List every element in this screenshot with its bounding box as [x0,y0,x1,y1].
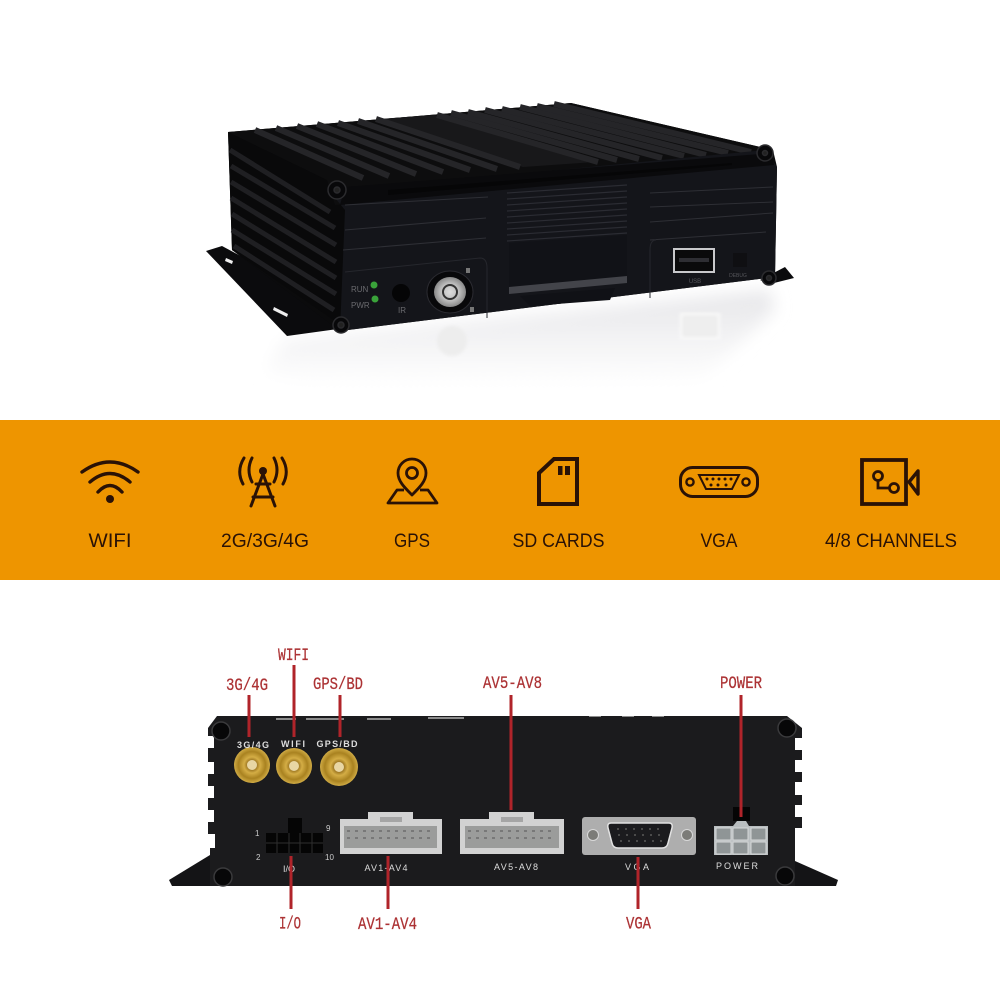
callout labels: AV5-AV8 [483,674,542,694]
rear body with fins [208,716,802,886]
screws [212,719,796,886]
IR window [392,284,410,315]
feature: 2G/3G/4G: 2G/3G/4G [221,530,309,552]
antenna connector: WIFI: WIFI [281,739,305,749]
debug port [729,253,747,279]
mounting flanges [206,246,794,336]
floor reflection [265,290,775,385]
centre panel [509,235,627,287]
callout labels: WIFI [278,646,309,666]
VGA connector: VGA [625,862,649,872]
VGA connector [582,817,696,872]
feature: VGA: VGA [700,530,738,552]
antenna connector: GPS/BD: GPS/BD [316,739,358,749]
top edge highlights [276,716,664,720]
debug port: DEBUG [729,273,747,279]
AV1-AV4 connector [340,812,442,873]
feature: 2G/3G/4G [221,458,309,552]
callout labels [226,646,762,935]
I/O connector: 9 [326,824,331,833]
feature: SD cards [512,459,604,552]
I/O connector: 2 [256,853,261,862]
callout labels: POWER [720,674,762,694]
left finned side [228,132,345,328]
I/O connector: 1 [255,829,260,838]
icon: video camera [862,460,918,504]
status lights RUN and PWR: PWR [351,301,370,310]
status lights RUN and PWR: RUN [351,285,369,294]
key lock [427,268,474,313]
corner screws [328,145,776,333]
divider recess [650,240,656,298]
feature: GPS: GPS [394,530,430,552]
USB port [674,249,714,285]
callout labels: VGA [626,914,651,934]
USB port: USB [689,279,701,285]
top heat-sink [228,103,775,205]
antenna connector: GPS/BD [316,739,358,786]
callout labels: I/O [279,914,301,934]
icon: VGA connector [680,468,758,496]
icon: SD card [539,459,577,504]
callout labels: AV1-AV4 [358,915,417,935]
callout leader lines [249,665,741,909]
antenna connector: 3G/4G: 3G/4G [237,740,269,750]
power connector: POWER [716,861,758,871]
feature banner [0,420,1000,580]
body silhouette [228,103,777,331]
feature: SD cards: SD CARDS [512,530,604,552]
feature: WIFI [82,462,138,552]
product photo: DVR rear ports [169,716,838,886]
antenna connector: 3G/4G [234,740,270,783]
IR window: IR [398,306,406,315]
feature: GPS [388,459,437,552]
antenna connector: WIFI [276,739,312,784]
power connector [714,807,768,871]
callout labels: 3G/4G [226,676,268,696]
feature: 4/8 channels [825,460,957,552]
icon: wifi [82,462,138,503]
front face [330,150,777,331]
centre vent [507,185,627,241]
AV1-AV4 connector: AV1-AV4 [364,863,408,873]
AV5-AV8 connector [460,812,564,872]
feature: VGA [680,468,758,552]
I/O connector [255,818,334,874]
AV5-AV8 connector: AV5-AV8 [494,862,538,872]
status lights RUN and PWR [351,282,378,310]
I/O connector: I/O [283,864,295,874]
feature: 4/8 channels: 4/8 CHANNELS [825,530,957,552]
side flanges [169,855,838,886]
icon: map pin [388,459,437,503]
I/O connector: 10 [325,853,334,862]
product photo: DVR front view [206,103,794,385]
icon: cell tower [240,458,286,506]
feature: WIFI: WIFI [88,530,132,552]
callout labels: GPS/BD [313,675,363,695]
